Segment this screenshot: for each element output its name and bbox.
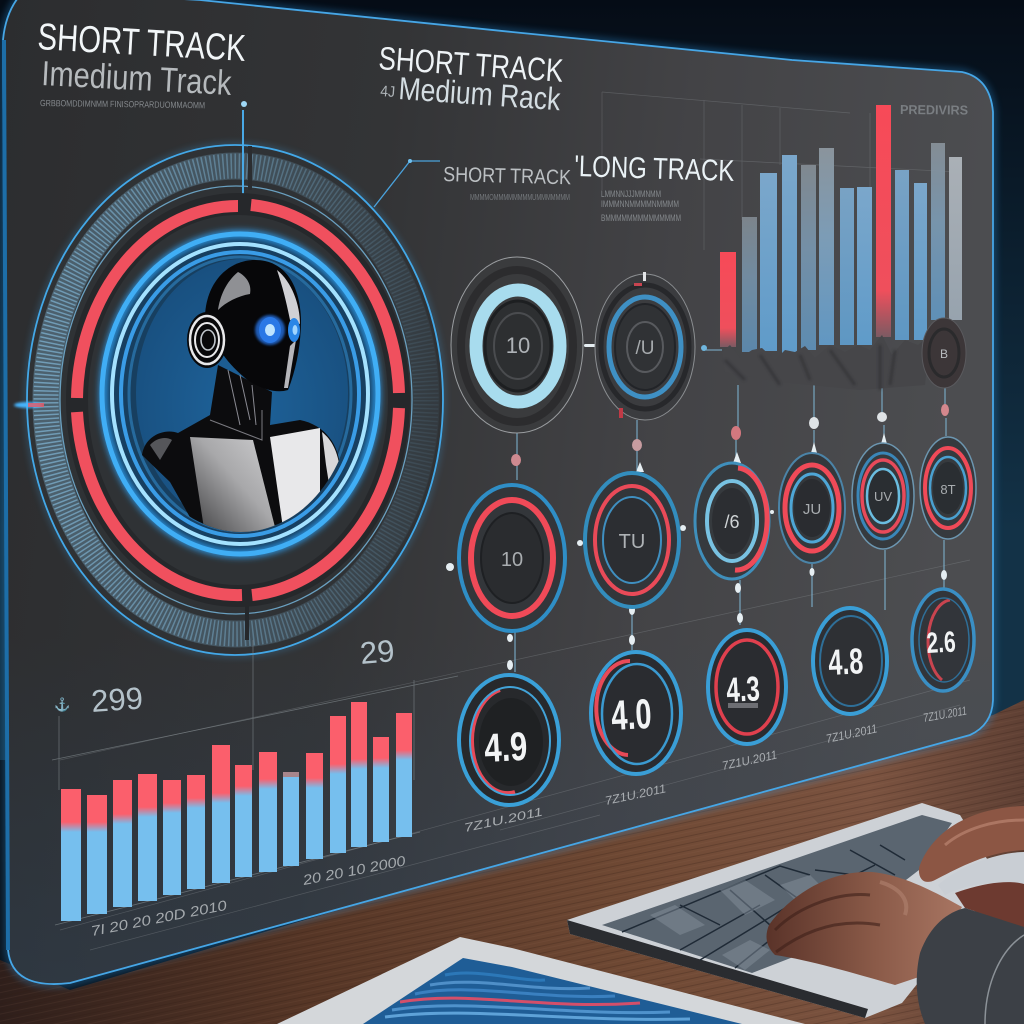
chart values	[54, 633, 396, 719]
label: top right chart legend: PREDIVIRS	[900, 102, 968, 118]
jagged chart base	[722, 335, 930, 390]
gauge: 2.6	[912, 589, 974, 691]
gauge date labels: 7Z1U.2011	[721, 748, 778, 773]
gauge row 2	[459, 437, 976, 631]
chart values: 299	[90, 680, 144, 719]
gauge: 4.0	[591, 652, 681, 774]
title: short track, medium track (center)	[377, 40, 565, 118]
robot eyes	[255, 315, 300, 345]
background wall	[0, 0, 1024, 760]
robot figure	[142, 260, 340, 535]
gauge: 2.6: 2.6	[926, 626, 957, 660]
gauge: row 2 item 1: 10	[501, 549, 523, 571]
chart axis lines	[52, 640, 458, 925]
gauge: small top right: B	[940, 347, 948, 361]
wooden desk	[0, 700, 1024, 1024]
gauge: row 2 item 4: JU	[803, 501, 821, 518]
title: short track, medium track (left): GRBBOMDDIMNMM FINISOPRARDUOMMAOMM	[40, 98, 205, 110]
back hand and mouse	[919, 806, 1024, 927]
label: long track	[574, 148, 735, 223]
gauge: large top left	[451, 257, 583, 433]
gauge: 4.8: 4.8	[827, 641, 864, 683]
gauge date labels: 7Z1U.2011	[463, 805, 544, 835]
label: long track: IMMMNNMMMMNMMMM	[601, 199, 679, 209]
label: long track: 'LONG TRACK	[574, 148, 735, 188]
gauge: 4.9	[459, 675, 559, 805]
gauge: large top left: 10	[506, 333, 530, 358]
chart date labels: 7I 20 20 20D 2010	[90, 897, 228, 939]
connector lines and nodes	[446, 344, 949, 672]
front hand	[767, 872, 962, 985]
title: short track, medium track (left)	[36, 17, 247, 110]
left spark marker	[14, 402, 44, 408]
decorative grid lines	[60, 92, 970, 950]
tablet on desk	[277, 937, 805, 1024]
robot head	[205, 260, 301, 391]
label: short track small: MMMMOMMMMMMMMUMMMMMMM	[470, 193, 570, 202]
gauge: 4.3	[708, 630, 786, 744]
outer hatched band	[27, 101, 443, 655]
robot headphone	[187, 312, 227, 368]
gauge: small top right	[922, 318, 966, 388]
title: short track, medium track (left): SHORT TRACK	[36, 17, 247, 70]
label: long track: BMMMMMMMMMMMMMM	[601, 213, 681, 223]
gauge: 4.8	[813, 608, 887, 714]
top bar chart	[720, 105, 962, 390]
gauge: 4.0: 4.0	[610, 690, 653, 739]
gauge: row 2 item 2	[585, 473, 679, 607]
blue glowing rings	[102, 234, 378, 554]
sweater sleeve	[917, 908, 1024, 1024]
bottom bar chart	[52, 633, 458, 939]
gauge date labels: 7Z1U.2011	[604, 781, 667, 808]
title: short track, medium track (left): Imedium Track	[41, 54, 233, 103]
label: long track: LMMNNJJJMMNMM	[601, 189, 661, 199]
gauge: row 2 item 5	[852, 443, 914, 549]
title: short track, medium track (center): SHORT TRACK	[377, 40, 565, 90]
gauge: row 2 item 6	[920, 437, 976, 539]
robot body	[142, 365, 340, 535]
gauge: row 2 item 1	[459, 485, 565, 631]
gauge date labels	[463, 704, 968, 835]
main ring gauge	[14, 101, 443, 655]
hands on keyboard	[767, 806, 1024, 1024]
gauge: 4.9: 4.9	[483, 723, 528, 771]
red segmented ring	[77, 204, 399, 596]
gauge: row 2 item 6: 8T	[940, 482, 956, 497]
title: short track, medium track (center): Medium Rack	[397, 72, 562, 118]
gauge row 1	[451, 257, 966, 433]
inner portrait background	[136, 259, 348, 527]
gauge: 4.3: 4.3	[725, 670, 761, 710]
chart date labels: 20 20 10 2000	[300, 852, 407, 888]
gauge date labels: 7Z1U.2011	[922, 704, 968, 725]
chart bars	[61, 702, 412, 921]
gauge date labels: 7Z1U.2011	[825, 721, 878, 746]
gauge: row 2 item 4	[779, 453, 845, 563]
gauge: row 2 item 2: TU	[619, 531, 645, 553]
chart values: 29	[359, 633, 396, 671]
chart values: ⚓	[54, 697, 70, 712]
keyboard	[567, 803, 1000, 1018]
gauge row 3 with values	[459, 589, 974, 805]
chart date labels	[90, 852, 407, 939]
gauge: second top	[595, 272, 695, 420]
label: short track small	[443, 163, 571, 202]
gauge: row 2 item 5: UV	[874, 489, 892, 504]
label: short track small: SHORT TRACK	[443, 163, 571, 190]
title: short track, medium track (center): 4J	[380, 83, 396, 101]
gauge: second top: /U	[636, 338, 654, 359]
gauge: row 2 item 3: /6	[724, 512, 740, 532]
gauge: row 2 item 3	[695, 463, 769, 579]
